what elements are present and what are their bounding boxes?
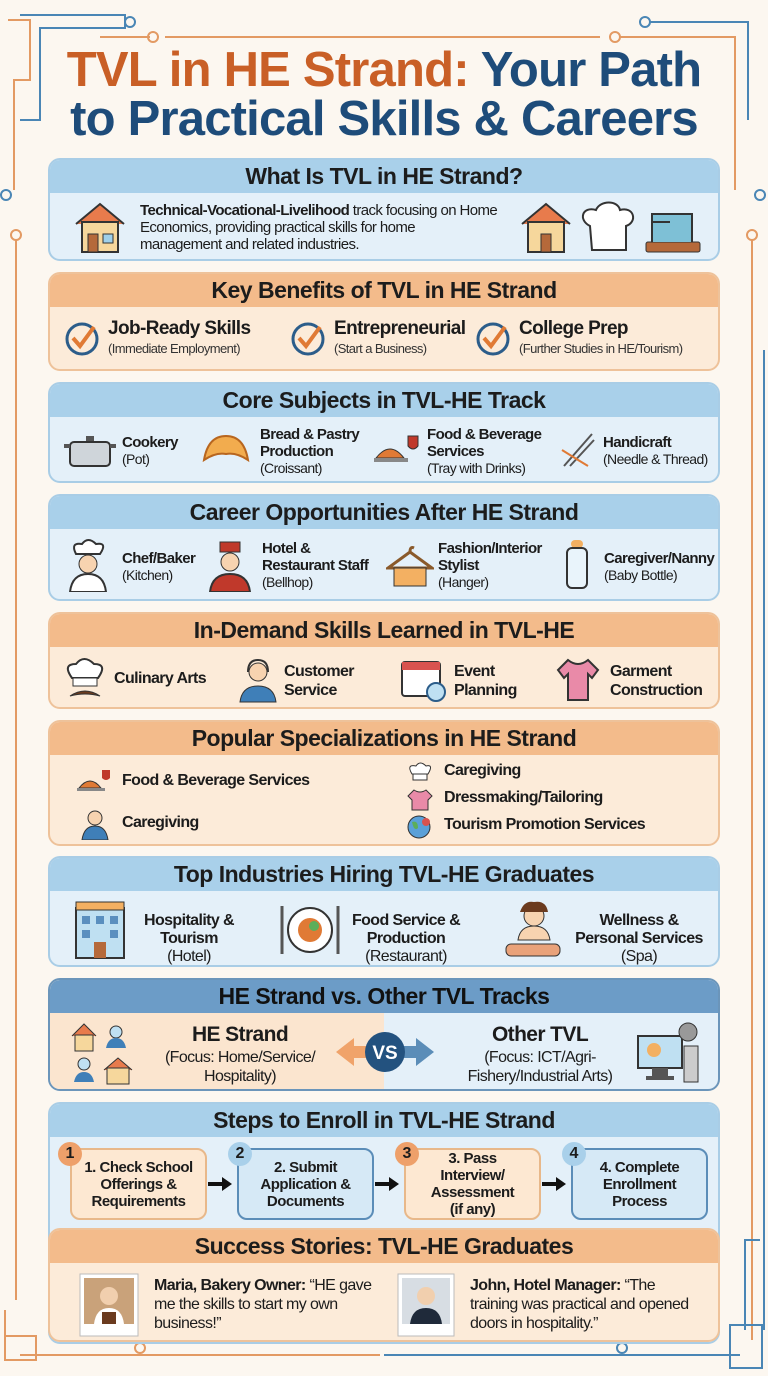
subject: food beverage: Services	[427, 443, 484, 460]
subject: cookery	[64, 434, 178, 467]
skill: culinary	[66, 658, 206, 696]
badges: 1	[66, 1145, 74, 1162]
benefit: job ready: Job-Ready Skills	[108, 318, 250, 339]
text: description: Technical-Vocational-Livelihood track focusing on Home Economics, providing practical skills for home management and related industries.	[140, 202, 497, 253]
industry: food service: Production	[367, 930, 445, 947]
benefit: college prep: (Further Studies in HE/Tourism)	[519, 341, 682, 356]
icons: house chef hat sewing machine	[521, 202, 700, 253]
career: caregiver: (Baby Bottle)	[604, 567, 677, 583]
benefit: entrepreneurial: Entrepreneurial	[334, 318, 465, 339]
industry: wellness	[506, 902, 703, 965]
panel: steps: 2	[236, 1145, 244, 1162]
skill: customer service: Customer	[284, 663, 354, 680]
benefit: job ready: (Immediate Employment)	[108, 341, 240, 356]
panel: steps: 3	[403, 1145, 411, 1162]
step 4: Process	[612, 1192, 667, 1210]
step 3	[404, 1148, 541, 1220]
skill: event planning: Planning	[454, 682, 517, 699]
subject: food beverage	[374, 426, 542, 476]
text: other TVL: Fishery/Industrial Arts)	[468, 1068, 612, 1085]
industry: food service: Food Service &	[352, 912, 460, 929]
heading: what is	[50, 160, 718, 193]
skill: garment: Garment	[610, 663, 672, 680]
career: caregiver	[566, 540, 715, 589]
subject: handicraft	[562, 433, 708, 467]
industry: food service	[280, 906, 460, 965]
career: stylist: Fashion/Interior	[438, 540, 542, 557]
list: left: Food & Beverage Services	[122, 772, 309, 789]
career: chef	[69, 539, 196, 592]
career: stylist	[386, 540, 542, 590]
step 3: 3. Pass	[448, 1150, 497, 1167]
heading: steps: Steps to Enroll in TVL-HE Strand	[213, 1107, 555, 1133]
icons: HE houses	[72, 1023, 132, 1084]
subject: handicraft: (Needle & Thread)	[603, 451, 708, 467]
heading: industries	[50, 858, 718, 891]
badges	[58, 1142, 82, 1166]
panel: success stories	[48, 1228, 720, 1342]
step 3: Assessment	[431, 1184, 514, 1201]
icon: house	[75, 202, 125, 253]
benefit: college prep	[476, 318, 682, 356]
heading: comparison	[50, 980, 718, 1013]
career: hotel: (Bellhop)	[262, 574, 313, 590]
vs badge with arrows	[336, 1032, 434, 1072]
list: right: Dressmaking/Tailoring	[444, 789, 603, 806]
step 1	[70, 1148, 207, 1220]
subject: handicraft: Handicraft	[603, 434, 671, 451]
panel: comparison	[48, 978, 720, 1091]
skill: garment: Construction	[610, 682, 702, 699]
skill: customer service: Service	[284, 682, 337, 699]
heading: careers	[50, 496, 718, 529]
list: right: Caregiving	[444, 762, 521, 779]
panel: specializations	[48, 720, 720, 846]
heading: what is: What Is TVL in HE Strand?	[245, 163, 523, 189]
step 1: Offerings &	[100, 1176, 177, 1192]
industry: food service: (Restaurant)	[365, 948, 447, 965]
story: John: John, Hotel Manager: “The training was practical and opened doors in hospitality.”	[470, 1277, 689, 1332]
subject: cookery: (Pot)	[122, 451, 149, 467]
subject: food beverage: Food & Beverage	[427, 426, 541, 443]
list: left: Caregiving	[122, 814, 199, 831]
list: right: Tourism Promotion Services	[444, 816, 645, 833]
skill: event planning	[401, 661, 517, 702]
heading: specializations	[50, 722, 718, 755]
step 4: Enrollment	[603, 1176, 676, 1192]
panel: core subjects	[48, 382, 720, 483]
industry: wellness: Wellness &	[599, 912, 679, 929]
subject: bread: (Croissant)	[260, 460, 322, 476]
industry: wellness: Personal Services	[575, 930, 703, 947]
icon: computer	[637, 1022, 698, 1082]
heading: success	[50, 1230, 718, 1263]
industry: wellness: (Spa)	[621, 948, 657, 965]
industry: hospitality	[75, 902, 234, 965]
career: hotel: Restaurant Staff	[262, 557, 368, 574]
benefit: entrepreneurial: (Start a Business)	[334, 341, 427, 356]
text: other TVL	[468, 1023, 612, 1085]
career: hotel: Hotel &	[262, 540, 310, 557]
step 1: Requirements	[91, 1192, 186, 1210]
industry: hospitality: Tourism	[160, 930, 218, 947]
text: other TVL: Other TVL	[492, 1023, 588, 1046]
heading: key benefits	[50, 274, 718, 307]
career: chef: Chef/Baker	[122, 550, 195, 567]
step 4: 4. Complete	[600, 1158, 679, 1176]
heading: careers: Career Opportunities After HE Strand	[190, 499, 578, 525]
skill: customer service	[239, 659, 354, 702]
subject: cookery: Cookery	[122, 434, 178, 451]
career: hotel	[209, 540, 369, 592]
text: HE strand: (Focus: Home/Service/	[165, 1049, 315, 1066]
panel: what is	[48, 158, 720, 261]
left half: HE	[50, 980, 384, 1093]
skill: garment	[556, 658, 702, 701]
benefit: entrepreneurial	[292, 318, 465, 356]
list: right	[407, 762, 645, 838]
career: caregiver: Caregiver/Nanny	[604, 550, 714, 567]
heading: success: Success Stories: TVL-HE Graduates	[195, 1233, 573, 1259]
text: HE strand: HE Strand	[192, 1023, 288, 1046]
panel: careers	[48, 494, 720, 601]
subject: bread: Production	[260, 443, 333, 460]
skill: event planning: Event	[454, 663, 495, 680]
heading: comparison: HE Strand vs. Other TVL Tracks	[218, 983, 549, 1009]
industry: hospitality: (Hotel)	[167, 948, 211, 965]
step 3: (if any)	[450, 1201, 495, 1218]
subject: bread	[202, 426, 360, 476]
subject: food beverage: (Tray with Drinks)	[427, 460, 525, 476]
panel: steps: 4	[570, 1145, 578, 1162]
text: other TVL: (Focus: ICT/Agri-	[484, 1049, 596, 1066]
title: to Practical Skills & Careers	[70, 92, 698, 146]
title: TVL in HE Strand: Your Path	[67, 43, 701, 97]
career: stylist: (Hanger)	[438, 574, 488, 590]
heading: core subjects: Core Subjects in TVL-HE Track	[223, 387, 545, 413]
step 4	[571, 1148, 708, 1220]
step 3: Interview/	[440, 1167, 505, 1184]
career: stylist: Stylist	[438, 557, 479, 574]
step 2: Documents	[267, 1192, 344, 1210]
arrows between steps	[208, 1177, 566, 1191]
story: Maria	[80, 1274, 372, 1336]
subject: bread: Bread & Pastry	[260, 426, 359, 443]
benefit: job ready	[66, 318, 250, 356]
step 1: 1. Check School	[84, 1158, 193, 1176]
step 2: Application &	[260, 1176, 351, 1192]
text: HE strand: Hospitality)	[204, 1068, 276, 1085]
list: left	[77, 770, 310, 840]
step 2	[237, 1148, 374, 1220]
vs badge with arrows: VS	[372, 1043, 398, 1064]
heading: specializations: Popular Specializations in HE Strand	[192, 725, 576, 751]
panel: steps	[48, 1102, 720, 1344]
text: HE strand	[165, 1023, 316, 1085]
heading: skills: In-Demand Skills Learned in TVL-HE	[194, 617, 574, 643]
panel: key benefits	[48, 272, 720, 371]
skill: culinary: Culinary Arts	[114, 670, 206, 687]
story: Maria: Maria, Bakery Owner: “HE gave me the skills to start my own business!”	[154, 1277, 371, 1332]
panel: in-demand skills	[48, 612, 720, 709]
heading: core subjects	[50, 384, 718, 417]
panel: industries	[48, 856, 720, 967]
heading: industries: Top Industries Hiring TVL-HE Graduates	[174, 861, 594, 887]
industry: hospitality: Hospitality &	[144, 912, 234, 929]
heading: steps	[50, 1104, 718, 1137]
step 2: 2. Submit	[274, 1158, 337, 1176]
benefit: college prep: College Prep	[519, 318, 628, 339]
story: John	[398, 1274, 689, 1336]
title	[67, 43, 701, 146]
heading: key benefits: Key Benefits of TVL in HE Strand	[211, 277, 557, 303]
heading: skills	[50, 614, 718, 647]
career: chef: (Kitchen)	[122, 567, 173, 583]
